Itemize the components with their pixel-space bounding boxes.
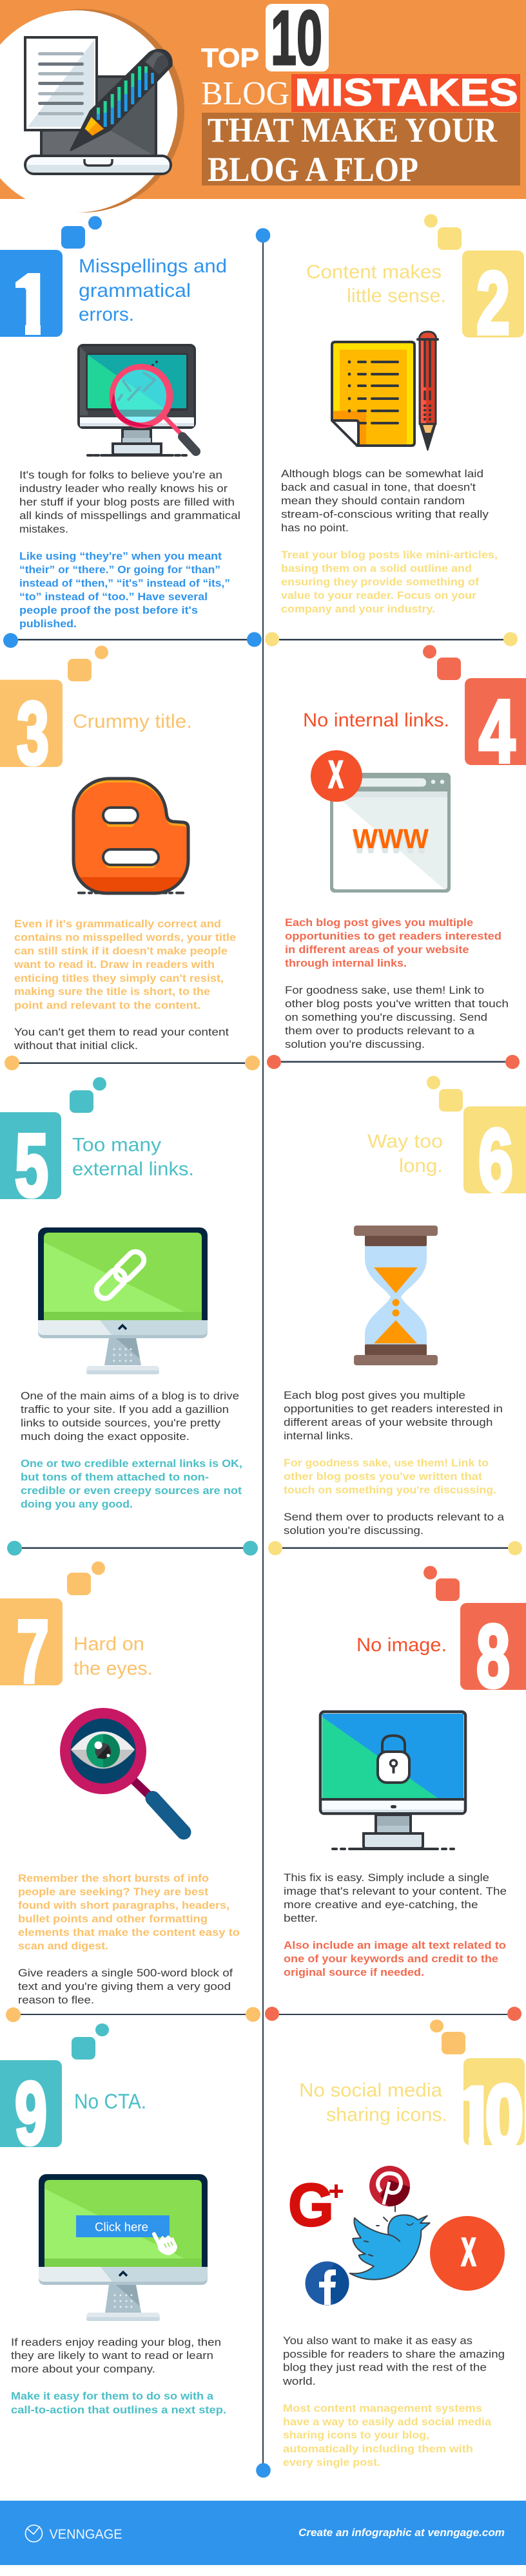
divider [265, 2007, 521, 2021]
heading: Way too [367, 1131, 443, 1152]
body text: You also want to make it as easy as [283, 2335, 472, 2347]
highlighted text: value to your reader. Focus on your [281, 590, 477, 601]
highlighted text: can still stink if it doesn't make people [14, 945, 228, 957]
body text: Although blogs can be somewhat laid [281, 468, 483, 480]
panel: mistake 5 [0, 1077, 258, 1556]
icon: browser window with www [311, 750, 451, 893]
body text: solution you're discussing. [284, 1525, 424, 1537]
heading: No social media [299, 2080, 442, 2101]
body text: has no point. [281, 522, 349, 534]
heading: errors. [79, 304, 134, 325]
panel: mistake 2 [265, 214, 524, 647]
body text: more creative and eye-catching, the [284, 1899, 478, 1911]
panel: mistake 8 [265, 1566, 526, 2021]
highlighted text [281, 549, 498, 615]
body text: other blog posts you've written that touch [285, 998, 509, 1010]
highlighted text: point and relevant to the content. [14, 999, 200, 1011]
body text [19, 469, 240, 535]
heading: sharing icons. [326, 2105, 447, 2125]
highlighted text: enticing titles they simply can't resist, [14, 972, 224, 984]
icon: laptop with document and pen [25, 37, 171, 174]
panel: mistake 7 [0, 1561, 260, 2022]
body text [11, 2336, 221, 2375]
body text: world. [282, 2376, 316, 2387]
body text: back and casual in tone, that doesn't [281, 482, 476, 493]
body text: image that's relevant to your content. The [284, 1886, 507, 1897]
highlighted text: in different areas of your website [285, 944, 469, 956]
highlighted text: ensuring they provide something of [281, 576, 480, 588]
icon: Facebook [306, 2262, 349, 2306]
number badge 4 [423, 645, 526, 781]
number badge 8: 8 [476, 1607, 510, 1706]
body text: You can't get them to read your content [14, 1027, 229, 1038]
divider [265, 632, 518, 647]
body text: internal links. [284, 1430, 353, 1442]
heading [299, 2080, 447, 2125]
highlighted text: people proof the post before it's [19, 605, 198, 616]
body text: opportunities to get readers interested in [284, 1403, 503, 1415]
body text: blog they just read with the rest of the [283, 2362, 487, 2374]
body text [284, 1511, 505, 1537]
highlighted text: one of your keywords and credit to the [284, 1953, 498, 1965]
heading: long. [399, 1155, 443, 1177]
heading [306, 261, 446, 307]
title: BLOG [201, 75, 289, 112]
call-to-action button: Click here [95, 2221, 148, 2235]
number badge 3 [0, 645, 108, 783]
highlighted text: “their” or “there.” Or going for “than” [19, 564, 220, 576]
icon: browser window with www: WWW [353, 829, 429, 860]
body text: they are likely to want to read or learn [11, 2350, 213, 2362]
icon: Pinterest [369, 2166, 410, 2206]
highlighted text: found with short paragraphs, headers, [18, 1900, 229, 1911]
icon: browser window with www: WWW [353, 824, 429, 855]
highlighted text [283, 2403, 492, 2468]
heading: No image. [356, 1634, 447, 1656]
highlighted text: published. [19, 618, 77, 630]
panel: mistake 3 [0, 645, 260, 1070]
divider [6, 2007, 260, 2022]
heading: No CTA. [74, 2090, 146, 2113]
body text: more about your company. [11, 2363, 155, 2375]
icon: X badge: X [462, 2231, 476, 2273]
body text: For goodness sake, use them! Link to [285, 985, 484, 996]
body text [18, 1967, 233, 2006]
footer brand: VENNGAGE [49, 2527, 122, 2542]
highlighted text: have a way to easily add social media [283, 2416, 492, 2428]
panel: mistake 1 [0, 216, 262, 648]
body text: all kinds of misspellings and grammatical [19, 510, 240, 522]
highlighted text: One or two credible external links is OK, [21, 1458, 242, 1470]
body text: Each blog post gives you multiple [284, 1390, 465, 1401]
highlighted text: original source if needed. [284, 1967, 424, 1978]
highlighted text: but tons of them attached to non- [21, 1472, 209, 1483]
heading: Misspellings and [79, 256, 227, 277]
title: THAT MAKE YOUR [208, 111, 498, 149]
number badge 1 [0, 216, 102, 337]
icon: Venngage logo [26, 2525, 43, 2542]
highlighted text: Treat your blog posts like mini-articles, [281, 549, 498, 561]
body text: reason to flee. [18, 1994, 94, 2006]
icon: monitor with chain link [38, 1227, 208, 1374]
highlighted text: making sure the title is short, to the [14, 986, 210, 998]
highlighted text: contains no misspelled words, your title [14, 932, 236, 943]
number badge 2: 2 [476, 254, 510, 353]
highlighted text: Also include an image alt text related to [284, 1940, 506, 1951]
number badge 10 [430, 2020, 525, 2145]
number badge 1: 1 [10, 256, 53, 355]
body text: mean they should contain random [281, 495, 465, 507]
highlighted text: through internal links. [285, 958, 407, 969]
footer [0, 2501, 526, 2565]
icon: social media logos [288, 2166, 505, 2306]
body text: them over to products relevant to a [285, 1025, 475, 1037]
body text: links to outside sources, you're pretty [21, 1417, 221, 1429]
highlighted text: every single post. [283, 2457, 380, 2468]
heading [367, 1131, 443, 1177]
icon: X badge [430, 2216, 505, 2291]
number badge 7 [0, 1561, 105, 1701]
body text: solution you're discussing. [285, 1039, 425, 1050]
divider [268, 1541, 522, 1555]
icon: monitor with padlock [320, 1712, 465, 1849]
heading: Crummy title. [73, 711, 192, 732]
body text [284, 1872, 507, 1924]
body text: without that initial click. [14, 1040, 138, 1052]
title: BLOG A FLOP [208, 150, 418, 189]
highlighted text [14, 918, 236, 1011]
body text: industry leader who really knows his or [19, 483, 228, 495]
heading: No internal links. [303, 710, 449, 731]
highlighted text: Even if it's grammatically correct and [14, 918, 221, 930]
highlighted text: “to” instead of “too.” Have several [19, 591, 208, 603]
divider [7, 1540, 258, 1556]
highlighted text: bullet points and other formatting [18, 1913, 208, 1925]
highlighted text [21, 1458, 242, 1510]
body text [282, 2335, 505, 2387]
body text: Give readers a single 500-word block of [18, 1967, 233, 1979]
highlighted text: company and your industry. [281, 603, 435, 615]
heading [79, 256, 227, 325]
heading: Too many [72, 1135, 161, 1155]
highlighted text: touch on something you're discussing. [284, 1484, 496, 1496]
highlighted text [11, 2391, 226, 2416]
body text: possible for readers to share the amazing [283, 2349, 505, 2360]
highlighted text: sharing icons to your blog, [283, 2429, 429, 2441]
heading: grammatical [79, 280, 191, 301]
call-to-action button [76, 2215, 170, 2237]
header banner [0, 0, 526, 213]
number badge 5 [0, 1077, 106, 1215]
icon: pointing hand [154, 2234, 177, 2255]
heading: Hard on [73, 1633, 144, 1655]
icon: monitor with magnifying glass [79, 345, 196, 455]
heading: little sense. [347, 285, 446, 307]
highlighted text [284, 1940, 506, 1978]
panel: mistake 4 [267, 645, 526, 1069]
body text [284, 1390, 503, 1442]
highlighted text: call-to-action that outlines a next step. [11, 2405, 226, 2416]
number badge 3: 3 [17, 684, 49, 783]
footer call to action: Create an infographic at venngage.com [298, 2526, 505, 2539]
body text [285, 985, 509, 1050]
number badge 7: 7 [17, 1602, 49, 1701]
icon: Google Plus: G [288, 2171, 334, 2239]
panel: mistake 10 [282, 2020, 525, 2468]
body text: It's tough for folks to believe you're an [19, 469, 222, 481]
highlighted text: doing you any good. [21, 1499, 133, 1510]
heading: Content makes [306, 261, 442, 283]
body text: her stuff if your blog posts are filled with [19, 497, 235, 508]
number badge 9 [0, 2023, 109, 2163]
body text: mistakes. [19, 524, 68, 535]
highlighted text: Each blog post gives you multiple [285, 917, 473, 929]
highlighted text: basing them on a solid outline and [281, 563, 472, 574]
number badge 10: 1 [453, 2069, 496, 2168]
icon: eye in magnifying glass [60, 1708, 184, 1832]
body text [14, 1027, 229, 1052]
body text: Send them over to products relevant to a [284, 1511, 505, 1523]
body text: traffic to your site. If you add a gazillion [21, 1404, 229, 1416]
body text: One of the main aims of a blog is to drive [21, 1390, 239, 1402]
body text: text and you're giving them a very good [18, 1981, 231, 1993]
body text: better. [284, 1913, 318, 1924]
highlighted text [19, 551, 230, 630]
icon: X badge [311, 750, 362, 802]
body text [281, 468, 489, 534]
highlighted text: instead of “then,” “it's” instead of “its,” [19, 578, 230, 589]
number badge 2 [424, 214, 524, 353]
panel: mistake 6 [268, 1075, 526, 1555]
divider [3, 632, 262, 648]
number badge 6 [427, 1075, 526, 1210]
title: MISTAKES [295, 71, 518, 114]
highlighted text: automatically including them with [283, 2443, 473, 2455]
icon: monitor with call-to-action button [39, 2174, 208, 2321]
divider [5, 1056, 260, 1070]
title [201, 0, 520, 189]
panel: mistake 9 [0, 2023, 226, 2416]
number badge 9: 9 [15, 2064, 47, 2163]
number badge 5: 5 [15, 1116, 48, 1215]
highlighted text: Make it easy for them to do so with a [11, 2391, 214, 2402]
highlighted text [285, 917, 502, 969]
highlighted text: people are seeking? They are best [18, 1886, 209, 1898]
highlighted text: Most content management systems [283, 2403, 482, 2414]
highlighted text: scan and digest. [18, 1940, 108, 1952]
icon: X badge: X [329, 753, 343, 796]
highlighted text: Remember the short bursts of info [18, 1873, 209, 1884]
heading [73, 1633, 153, 1680]
title: TOP [201, 43, 259, 73]
highlighted text: elements that make the content easy to [18, 1927, 240, 1938]
body text: This fix is easy. Simply include a single [284, 1872, 489, 1884]
heading [72, 1135, 194, 1180]
highlighted text: want to read it. Draw in readers with [14, 959, 215, 971]
central timeline [256, 228, 271, 2477]
highlighted text: For goodness sake, use them! Link to [284, 1457, 489, 1469]
highlighted text [18, 1873, 240, 1952]
icon: Twitter bird [350, 2206, 430, 2280]
divider [267, 1055, 520, 1069]
body text [21, 1390, 239, 1443]
body text: much doing the exact opposite. [21, 1431, 190, 1443]
highlighted text: Like using “they're” when you meant [19, 551, 222, 562]
highlighted text [284, 1457, 496, 1496]
highlighted text: opportunities to get readers interested [285, 931, 502, 942]
highlighted text: credible or even creepy sources are not [21, 1485, 242, 1497]
heading: external links. [72, 1159, 194, 1180]
body text: stream-of-conscious writing that really [281, 509, 489, 520]
body text: different areas of your website through [284, 1417, 492, 1428]
header circle [0, 9, 184, 213]
icon: hourglass [354, 1226, 438, 1365]
icon: notepad and pencil [332, 332, 438, 450]
highlighted text: other blog posts you've written that [284, 1471, 483, 1482]
number badge 8 [424, 1566, 526, 1706]
heading: the eyes. [73, 1658, 153, 1680]
icon: Blogger logo [71, 779, 193, 896]
body text: If readers enjoy reading your blog, then [11, 2336, 221, 2348]
body text: on something you're discussing. Send [285, 1012, 487, 1023]
